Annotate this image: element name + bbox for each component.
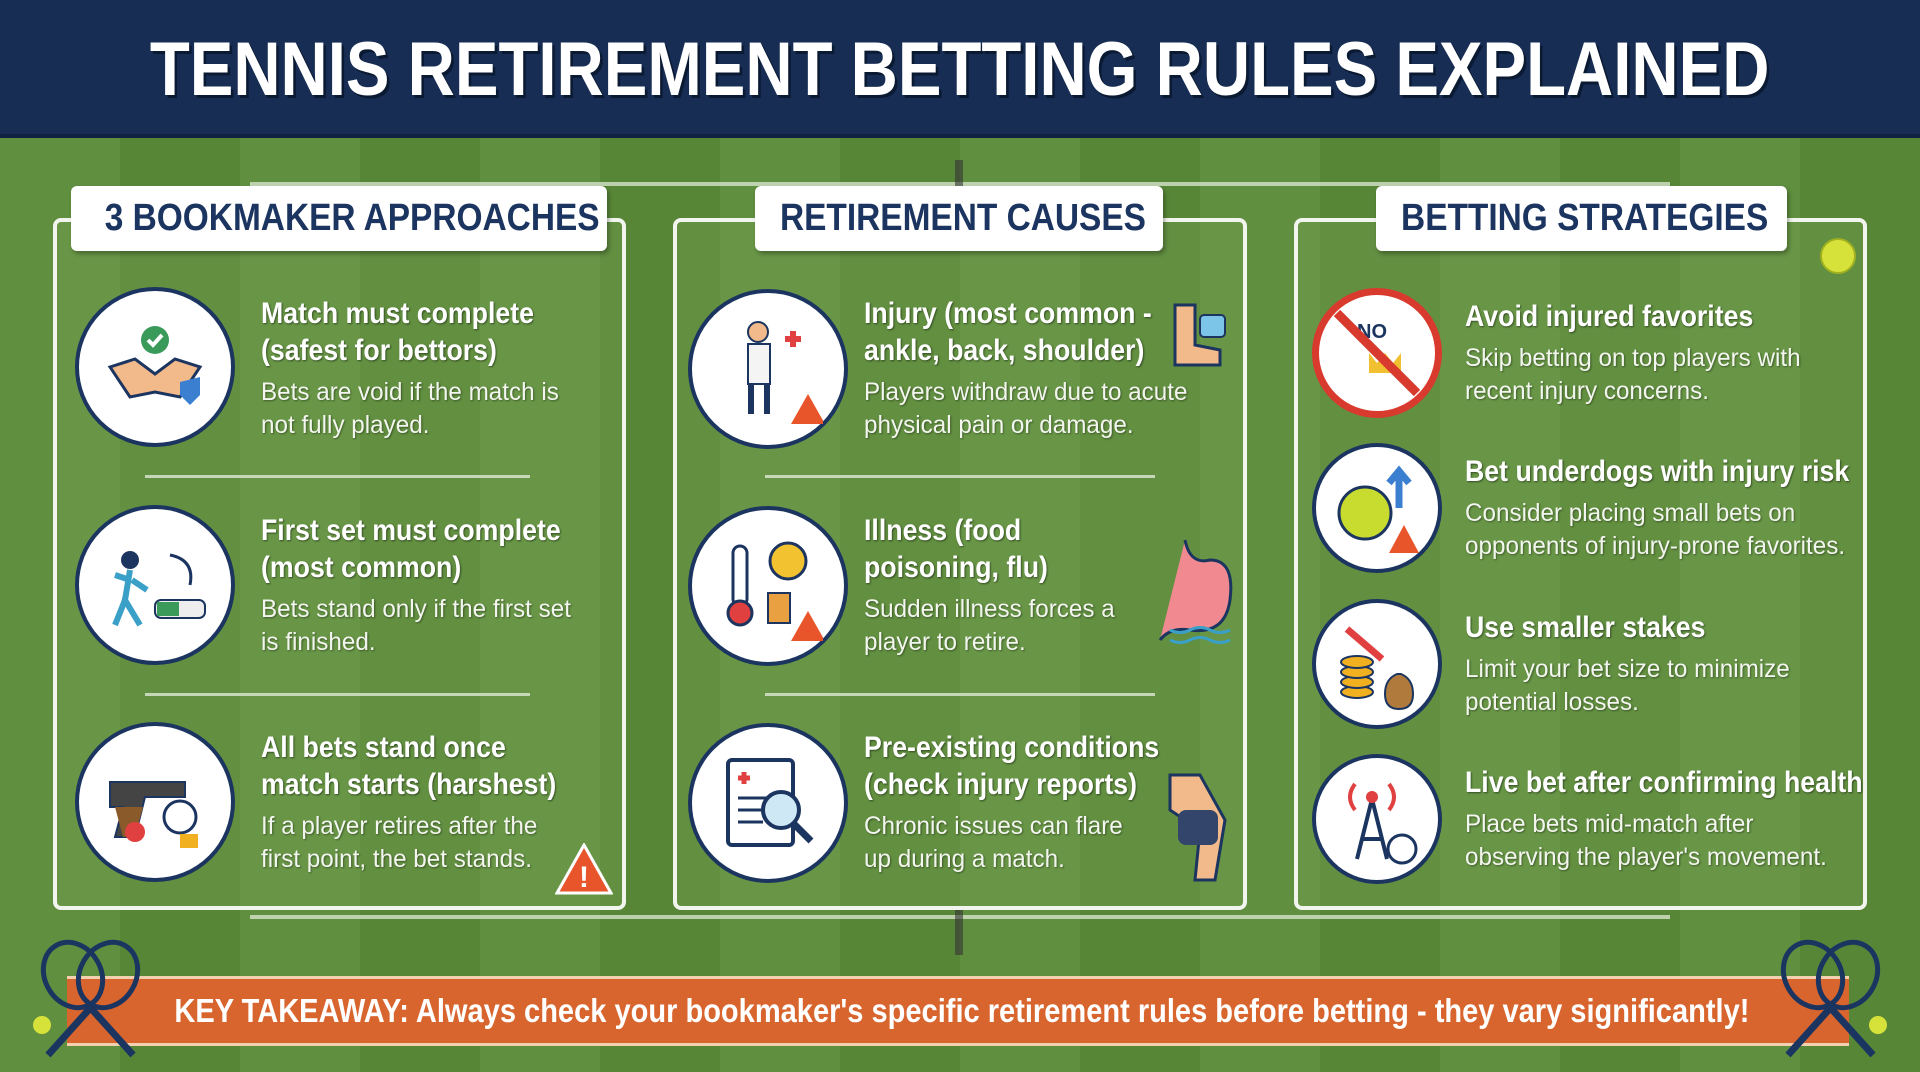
- heading: retirement causes: RETIREMENT CAUSES: [780, 197, 1146, 239]
- text: pre-existing: Pre-existing conditions: [864, 731, 1159, 764]
- text: match must complete: Match must complete: [261, 297, 534, 330]
- text: Skip betting on top players with: [1465, 344, 1801, 372]
- text: avoid injured favorites: Avoid injured favorites: [1465, 300, 1753, 333]
- text: first set: First set must complete: [261, 514, 561, 547]
- text: bet underdogs: Bet underdogs with injury risk: [1465, 455, 1849, 488]
- text: all bets stand: All bets stand once: [261, 731, 506, 764]
- icon: warning: [555, 843, 613, 894]
- text: Sudden illness forces a: [864, 595, 1115, 623]
- text: first set: (most common): [261, 551, 461, 584]
- icon: revolver: [75, 722, 235, 882]
- icon: underdog ball: [1312, 443, 1442, 573]
- text: illness: Illness (food: [864, 514, 1021, 547]
- text: smaller stakes: Use smaller stakes: [1465, 611, 1705, 644]
- icon: no injured favorites: NO: [1357, 321, 1387, 343]
- text: all bets stand: match starts (harshest): [261, 768, 556, 801]
- panel: retirement causes: [673, 218, 1247, 910]
- heading: betting strategies: [1376, 186, 1787, 251]
- icon: no injured favorites: [1312, 288, 1442, 418]
- text: not fully played.: [261, 411, 430, 439]
- text: observing the player's movement.: [1465, 843, 1827, 871]
- text: first point, the bet stands.: [261, 845, 532, 873]
- text: Limit your bet size to minimize: [1465, 655, 1790, 683]
- text: match must complete: (safest for bettors): [261, 334, 497, 367]
- icon: rackets left: [33, 940, 140, 1058]
- title: TENNIS RETIREMENT BETTING RULES EXPLAINED: [150, 27, 1770, 112]
- text: Place bets mid-match after: [1465, 810, 1753, 838]
- icon: stomach: [1158, 540, 1232, 644]
- text: match must complete: [261, 297, 535, 368]
- text: Consider placing small bets on: [1465, 499, 1795, 527]
- icon: rackets right: [1780, 940, 1887, 1058]
- heading: retirement causes: [755, 186, 1163, 251]
- text: is finished.: [261, 628, 376, 656]
- footer: key takeaway: KEY TAKEAWAY: Always check your bookmaker's specific retirement rules before betting - they vary significantly!: [174, 992, 1749, 1029]
- text: first set: [261, 514, 562, 585]
- text: Chronic issues can flare: [864, 812, 1123, 840]
- text: up during a match.: [864, 845, 1065, 873]
- text: live bet: Live bet after confirming health: [1465, 766, 1863, 799]
- panel: betting strategies: [1294, 218, 1867, 910]
- text: injury: Injury (most common -: [864, 297, 1152, 330]
- icon: warning: !: [579, 861, 589, 894]
- text: Bets stand only if the first set: [261, 595, 571, 623]
- text: all bets stand: [261, 731, 557, 802]
- text: recent injury concerns.: [1465, 377, 1709, 405]
- icon: handshake: [75, 287, 235, 447]
- text: potential losses.: [1465, 688, 1639, 716]
- icon: knee brace: [1168, 774, 1226, 882]
- icon: coins: [1312, 599, 1442, 729]
- text: pre-existing: (check injury reports): [864, 768, 1137, 801]
- text: Bets are void if the match is: [261, 378, 559, 406]
- text: If a player retires after the: [261, 812, 537, 840]
- text: injury: [864, 297, 1152, 368]
- text: physical pain or damage.: [864, 411, 1134, 439]
- icon: clipboard: [688, 723, 848, 883]
- text: opponents of injury-prone favorites.: [1465, 532, 1845, 560]
- text: illness: [864, 514, 1048, 585]
- footer: key takeaway: [67, 976, 1849, 1046]
- heading: betting strategies: BETTING STRATEGIES: [1401, 197, 1768, 239]
- icon: injured player: [688, 289, 848, 449]
- text: injury: ankle, back, shoulder): [864, 334, 1144, 367]
- text: player to retire.: [864, 628, 1026, 656]
- icon: tennis ball top right: [1820, 238, 1856, 274]
- icon: first set: [75, 505, 235, 665]
- icon: live tower: [1312, 754, 1442, 884]
- header: [0, 0, 1920, 138]
- heading: 3 bookmaker approaches: [71, 186, 607, 251]
- text: Players withdraw due to acute: [864, 378, 1188, 406]
- text: pre-existing: [864, 731, 1160, 802]
- heading: 3 bookmaker approaches: 3 BOOKMAKER APPROACHES: [105, 197, 600, 239]
- panel: bookmaker approaches: [53, 218, 626, 910]
- text: illness: poisoning, flu): [864, 551, 1048, 584]
- icon: illness: [688, 506, 848, 666]
- icon: ankle: [1174, 304, 1226, 366]
